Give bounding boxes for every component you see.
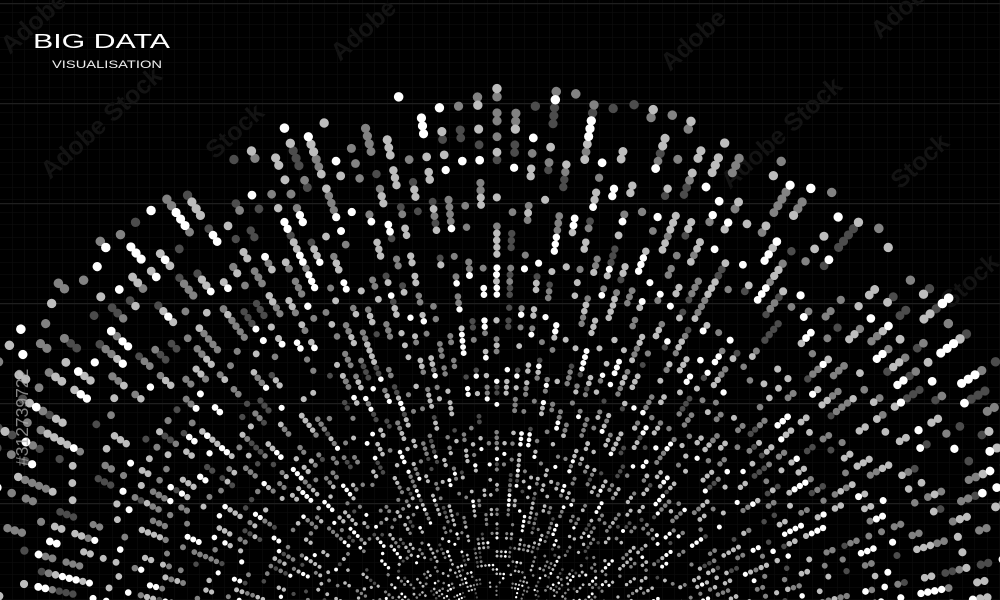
subtitle: VISUALISATION [52,59,162,71]
image id watermark: #312739722 [12,369,32,466]
watermark: Adobe Stock repeated diagonals: Adobe Stock [715,71,848,194]
watermark: Adobe Stock repeated diagonals [0,0,1000,314]
watermark: Adobe Stock repeated diagonals: Adobe Stock [35,61,168,184]
watermark: Adobe Stock repeated diagonals: Adobe [655,4,732,76]
title: BIG DATA [33,31,171,53]
watermark: Adobe Stock repeated diagonals: Stock [885,128,955,194]
watermark: Adobe Stock repeated diagonals: Stock [200,98,270,164]
